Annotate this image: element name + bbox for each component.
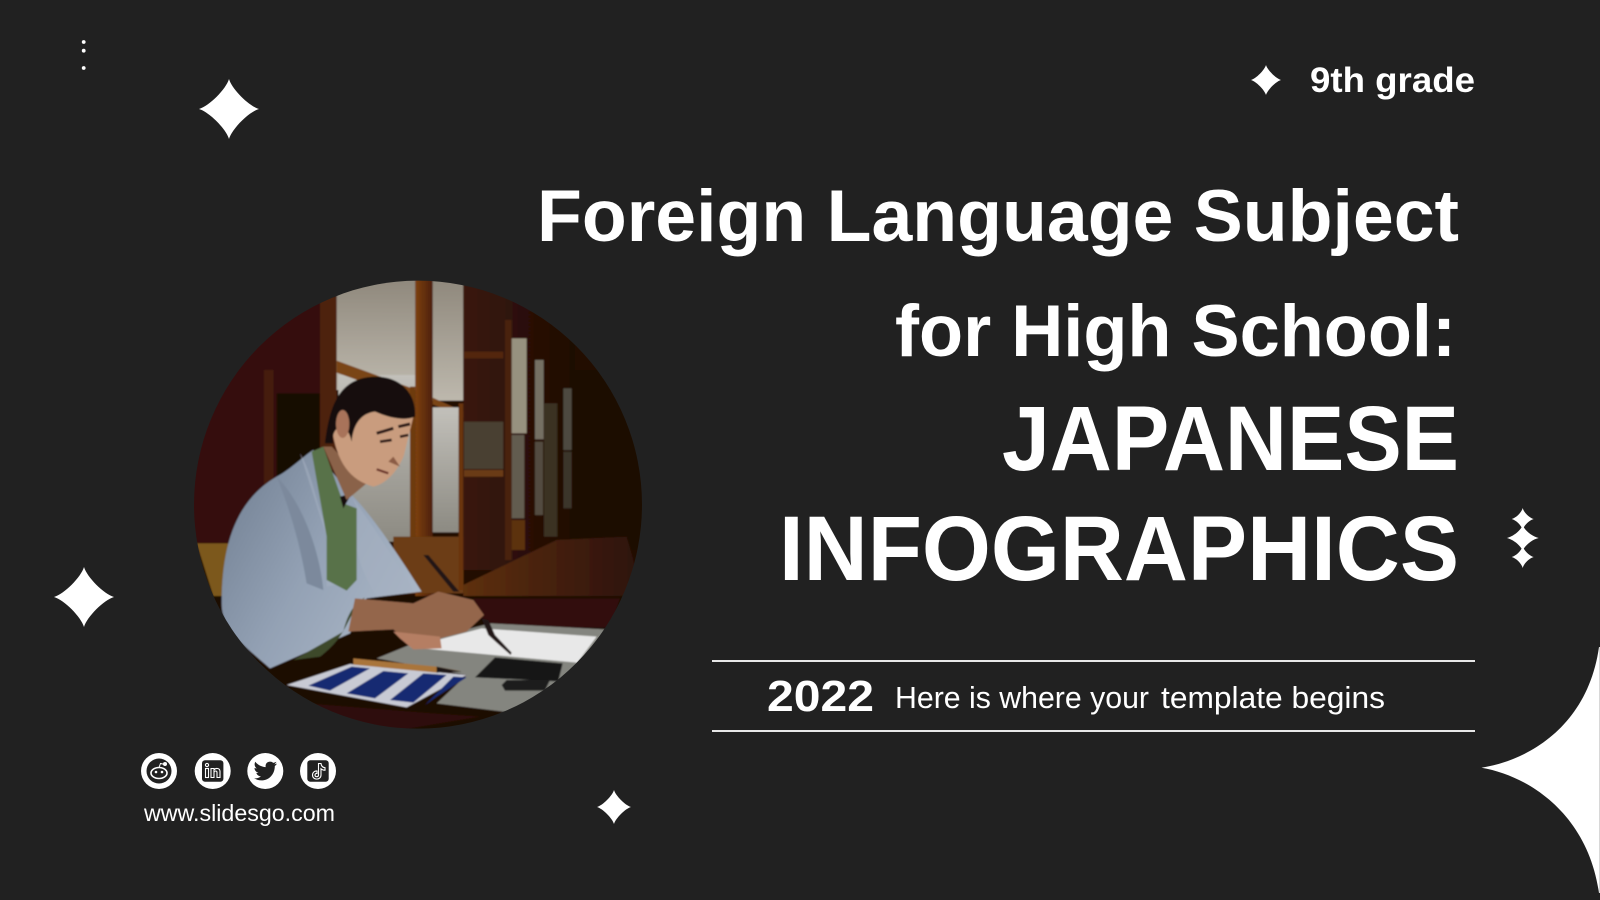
icon: small sparkle bottom centre xyxy=(597,790,631,824)
website url: www.slidesgo.com xyxy=(143,800,335,826)
title xyxy=(537,176,1459,600)
title: for High School: xyxy=(895,291,1456,372)
striped cloth xyxy=(287,664,467,707)
rolled brush on table xyxy=(353,658,460,673)
icon: large sparkle lower left xyxy=(54,567,114,627)
room backdrop xyxy=(200,286,638,598)
subtitle band xyxy=(712,660,1475,732)
table xyxy=(214,595,622,710)
forearm and hand xyxy=(348,591,485,638)
tagline: Here is where your xyxy=(895,680,1149,715)
kimono xyxy=(222,450,422,668)
collar xyxy=(312,447,357,591)
icon: tiktok xyxy=(300,753,336,789)
icon: reddit xyxy=(141,753,177,789)
title: INFOGRAPHICS xyxy=(779,498,1459,600)
icon: large sparkle top left xyxy=(199,79,259,139)
icon: linkedin xyxy=(195,753,231,789)
tagline: template begins xyxy=(1161,680,1385,715)
paper xyxy=(410,628,597,663)
ink stone xyxy=(475,657,563,681)
title: Foreign Language Subject xyxy=(537,176,1459,257)
neck xyxy=(323,447,367,500)
grade label: 9th grade xyxy=(1310,61,1475,100)
icon: sparkle by grade label xyxy=(1251,65,1281,95)
cuff xyxy=(293,597,365,660)
writing brush xyxy=(423,555,512,655)
icon: triple sparkle xyxy=(1507,508,1539,568)
social icons xyxy=(141,753,336,789)
felt mat xyxy=(377,623,605,712)
decorative dots xyxy=(82,40,86,70)
year: 2022 xyxy=(767,672,874,721)
title: JAPANESE xyxy=(1002,388,1459,490)
floor xyxy=(462,536,634,598)
photo: man writing Japanese calligraphy xyxy=(194,280,642,728)
corner shape: white concave star xyxy=(1482,647,1600,893)
face xyxy=(332,400,413,487)
icon: twitter xyxy=(247,753,283,789)
